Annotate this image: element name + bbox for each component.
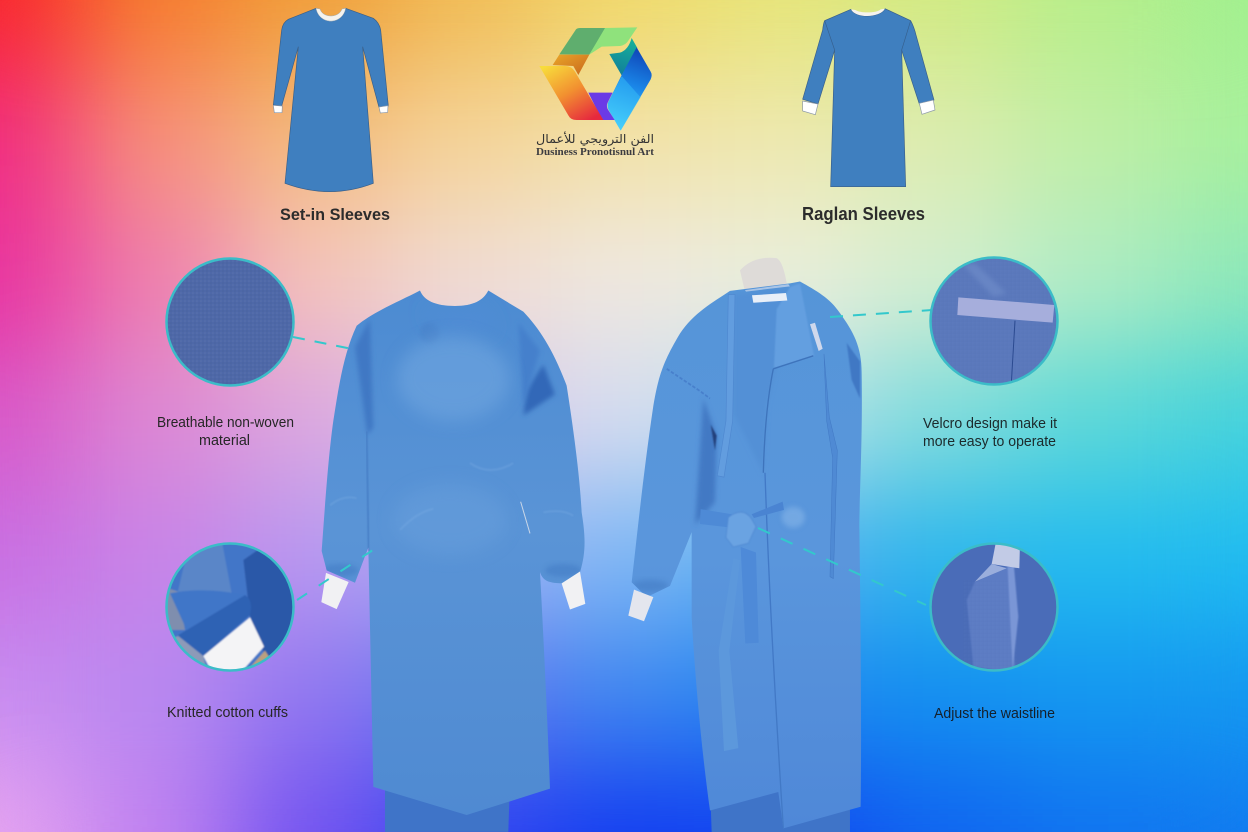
circle: velcro close-up [932,258,1056,384]
logo arabic name: الفن الترويجي للأعمال [536,131,654,147]
panel: waistline detail [927,540,1063,722]
panel: breathable material detail [157,252,300,449]
circle: fabric texture [168,260,292,384]
icon: set-in sleeve gown diagram [273,8,388,192]
icon: raglan sleeve gown diagram [803,9,935,187]
logo latin name: Dusiness Pronotisnul Art [536,147,655,158]
leader line: velcro [830,310,932,317]
shoulder tie [717,295,735,477]
mannequin neck [740,258,787,292]
panel: velcro detail [923,253,1063,450]
left cuff [321,573,349,609]
panel: knitted cuffs detail [165,542,295,717]
circle: cuff close-up [168,544,292,670]
caption: velcro: Velcro design make it [923,416,1057,432]
sleeve cuff [628,590,653,621]
logo: hexagon mark with company name [536,27,655,158]
photo: back view gown on mannequin [628,258,862,832]
leader line: material [293,337,352,349]
caption: cuffs: Knitted cotton cuffs [167,705,288,721]
caption: material: material [199,433,250,449]
hanging straps [741,547,759,643]
caption: velcro: more easy to operate [923,434,1056,450]
leader line: waistline [758,528,926,605]
caption: material: Breathable non-woven [157,415,294,431]
heading: set-in sleeves: Set-in Sleeves [280,205,390,224]
heading: raglan sleeves: Raglan Sleeves [802,204,925,224]
photo: front view gown [321,291,585,832]
knot [726,512,756,547]
leader line: cuffs [297,544,382,600]
caption: waistline: Adjust the waistline [934,706,1055,722]
velcro strip [810,323,823,351]
right cuff [562,571,585,609]
right side tie [824,354,837,579]
collar interior [745,284,790,292]
waist belt [700,509,732,528]
neck label [752,293,787,303]
icon: hexagon logo mark [539,27,652,131]
circle: waistline close-up [932,544,1056,670]
